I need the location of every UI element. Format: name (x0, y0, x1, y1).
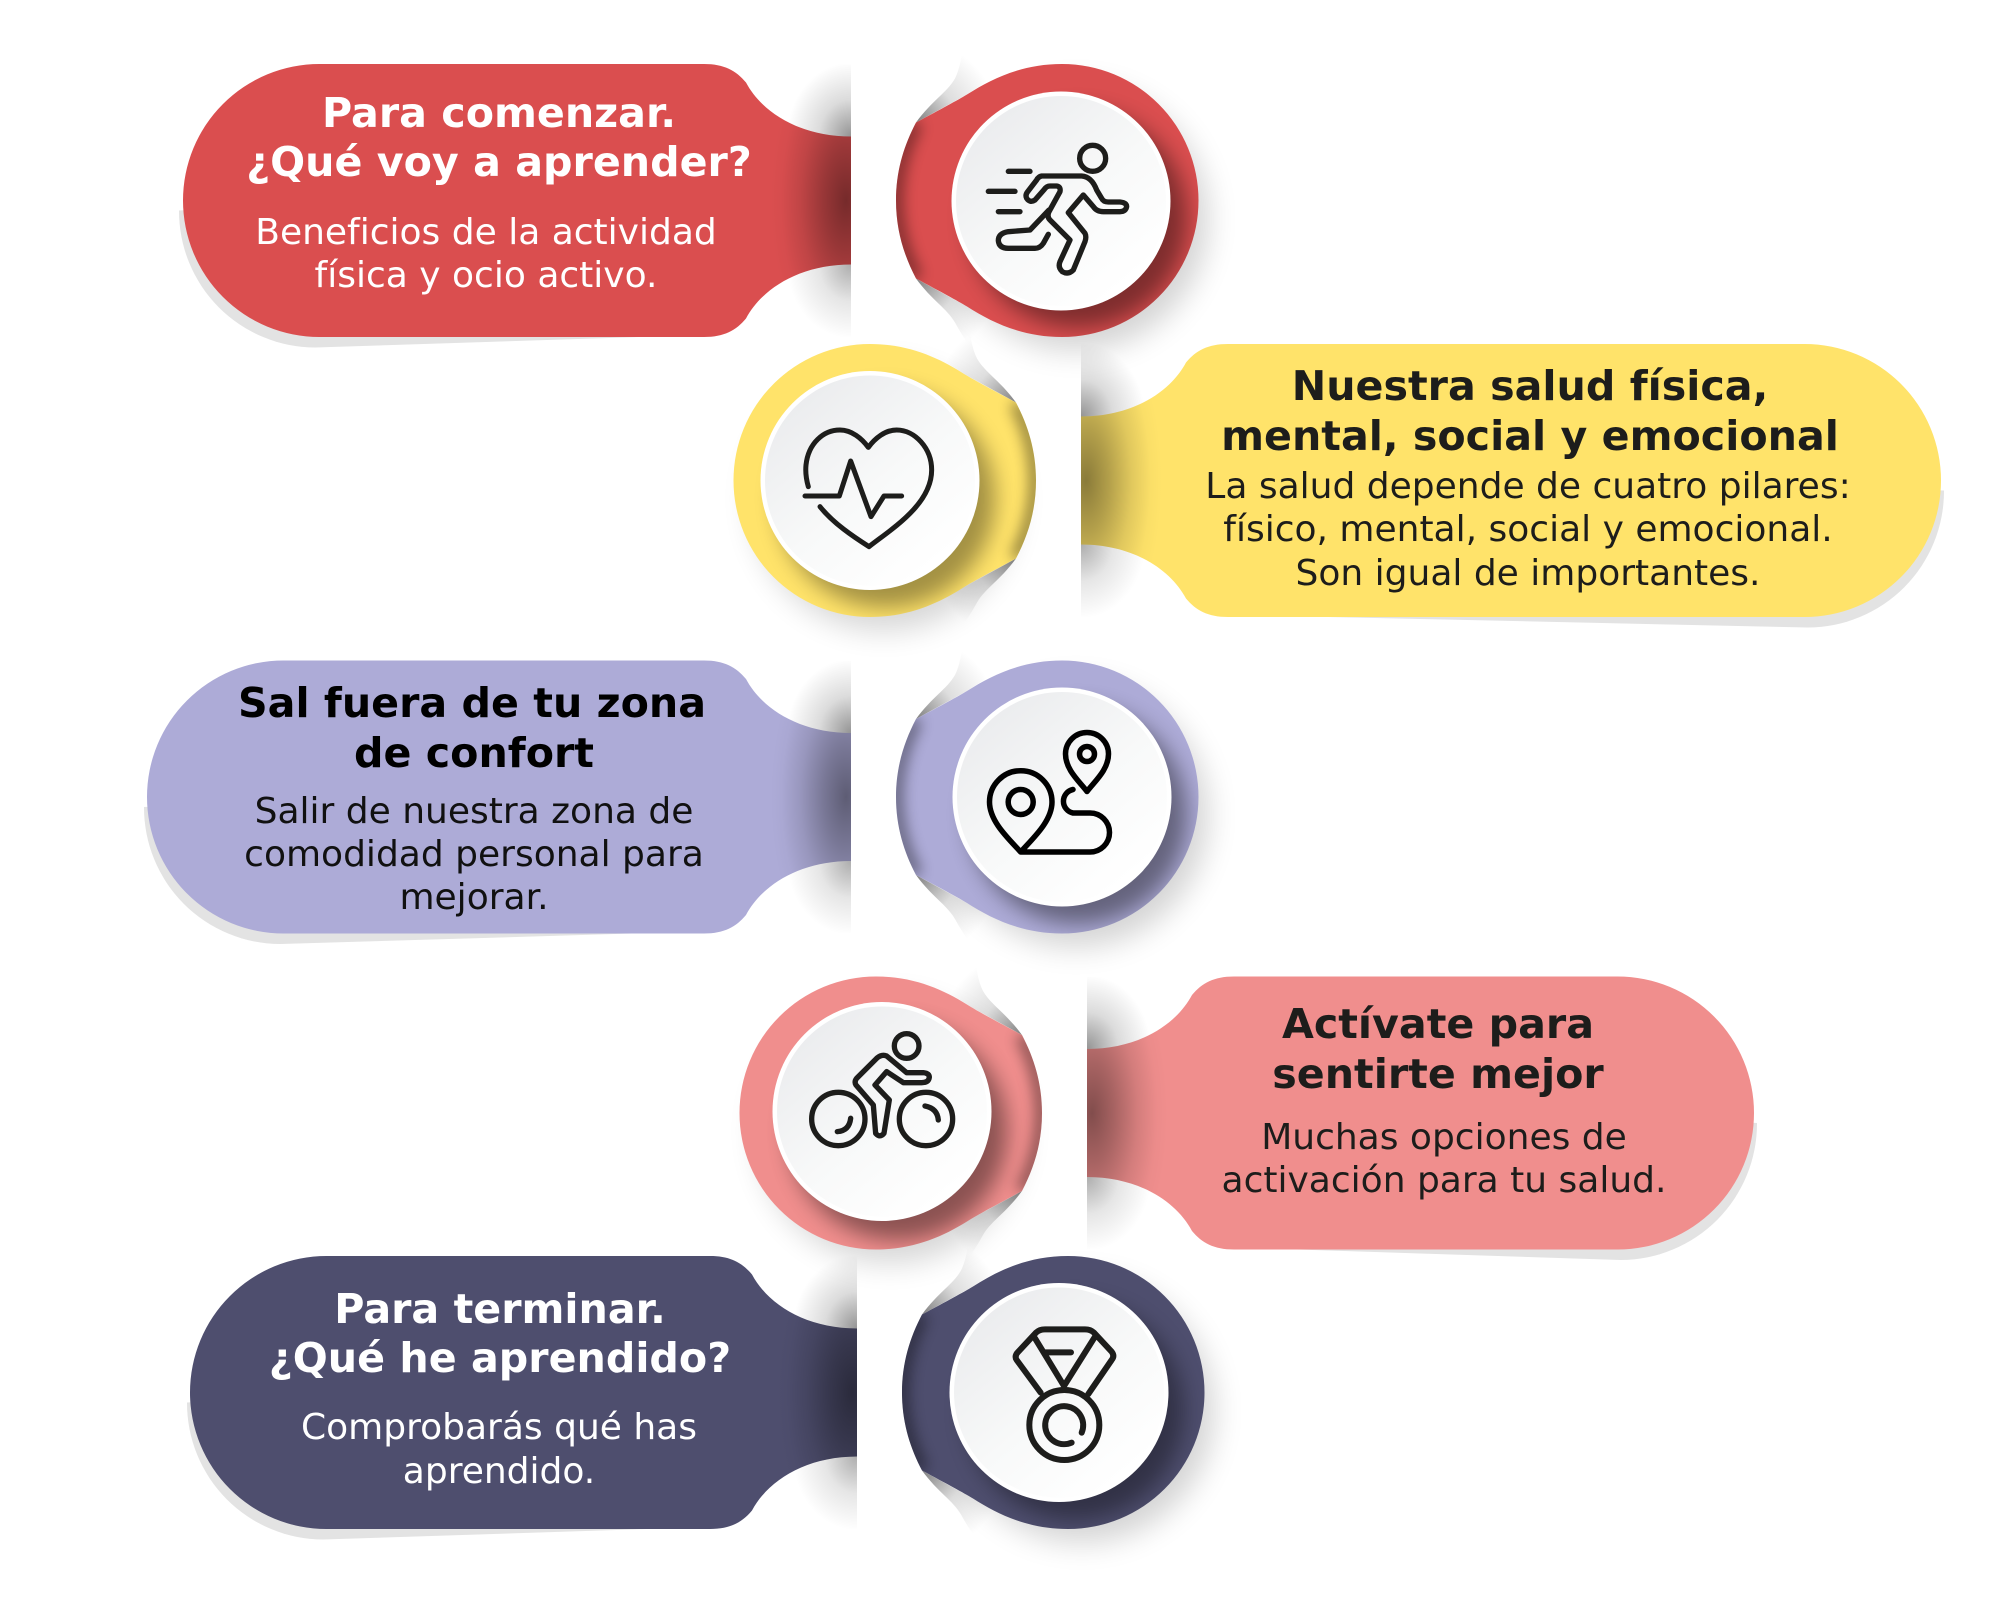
title: Actívate: sentirte mejor (1272, 1050, 1604, 1098)
title: Sal fuera: Sal fuera de tu zona (238, 679, 706, 727)
text: La salud: La salud depende de cuatro pilares: (1205, 466, 1851, 507)
text: Salir: mejorar. (399, 877, 549, 918)
title: Nuestra salud: Nuestra salud física, (1292, 362, 1768, 410)
title: Para comenzar: ¿Qué voy a aprender? (246, 138, 752, 186)
icon: runner (952, 92, 1170, 310)
shape: yellow card and medallion (734, 322, 1944, 640)
panel: step 2, Nuestra salud (734, 322, 1944, 640)
text: Comprobarás: Comprobarás qué has (301, 1407, 697, 1448)
text: Muchas opciones: Muchas opciones de (1261, 1117, 1627, 1158)
panel: step 1, Para comenzar (179, 42, 1208, 360)
text: Salir: comodidad personal para (244, 834, 704, 875)
title: Sal fuera: de confort (354, 729, 594, 777)
shape: pink card and medallion (740, 955, 1757, 1273)
shape: red card and medallion (179, 42, 1208, 360)
icon: heart pulse (760, 371, 980, 590)
text: Muchas opciones: activación para tu salud. (1222, 1160, 1666, 1201)
icon: cyclist (772, 1002, 992, 1221)
text: Beneficios: física y ocio activo. (315, 255, 657, 296)
panel: step 5, Para terminar (187, 1234, 1214, 1552)
title: Nuestra salud: mental, social y emocional (1221, 412, 1839, 460)
shape: purple card and medallion (144, 639, 1208, 957)
title: Para terminar: ¿Qué he aprendido? (269, 1334, 731, 1382)
text: Beneficios: Beneficios de la actividad (255, 212, 717, 253)
icon: medal (950, 1283, 1168, 1502)
title: Actívate: Actívate para (1282, 1000, 1594, 1048)
shape: navy card and medallion (187, 1234, 1214, 1552)
title: Para terminar: Para terminar. (334, 1285, 666, 1333)
text: La salud: Son igual de importantes. (1296, 553, 1760, 594)
title: Para comenzar: Para comenzar. (322, 89, 676, 137)
text: Salir: Salir de nuestra zona de (255, 791, 693, 832)
icon: route pins (952, 688, 1172, 906)
text: Comprobarás: aprendido. (403, 1451, 595, 1492)
panel: step 3, Sal fuera (144, 639, 1208, 957)
text: La salud: físico, mental, social y emocional. (1223, 509, 1833, 550)
panel: step 4, Actívate (740, 955, 1757, 1273)
